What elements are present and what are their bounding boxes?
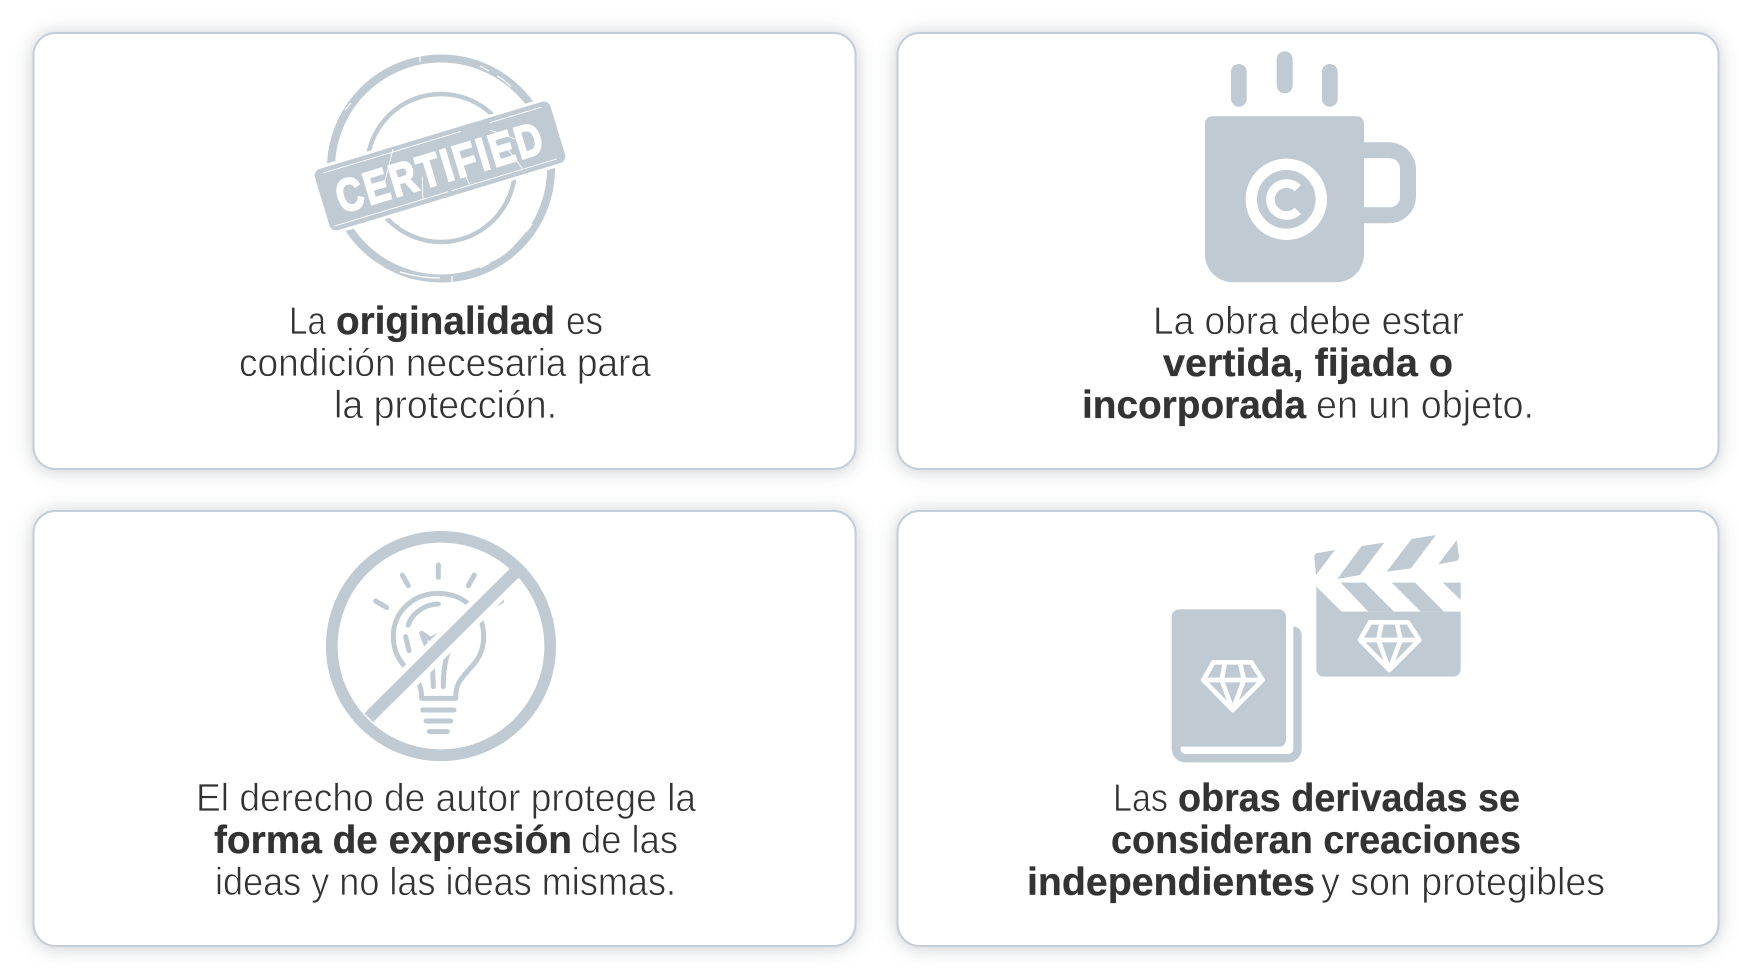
text: forma de expresion: forma de expresión: [214, 819, 572, 862]
icon: crossed light bulb: [332, 537, 550, 755]
panel: obra fijada: [898, 33, 1718, 469]
icon: certified stamp: [310, 54, 570, 284]
text: obras derivadas: y son protegibles: [1321, 861, 1605, 904]
panel: obras derivadas: [898, 511, 1718, 946]
text: obra fijada: en un objeto.: [1316, 384, 1534, 427]
text: obra fijada: [1082, 300, 1534, 427]
icon: clapperboard: [1314, 535, 1461, 677]
text: obra fijada: incorporada: [1082, 384, 1306, 427]
text: obras derivadas: consideran creaciones: [1111, 819, 1521, 862]
panel: originalidad: [34, 33, 856, 469]
text: originalidad: la protección.: [334, 384, 557, 427]
panel: forma de expresion: [34, 511, 856, 946]
text: forma de expresion: [196, 777, 696, 904]
text: obras derivadas: [1027, 777, 1605, 904]
text: originalidad: [239, 300, 651, 427]
stamp word: CERTIFIED: [329, 111, 551, 223]
text: originalidad: La: [289, 300, 326, 343]
icon: book: [1172, 609, 1302, 762]
text: obras derivadas: obras derivadas se: [1178, 777, 1520, 820]
text: originalidad: originalidad: [336, 300, 555, 343]
text: forma de expresion: ideas y no las ideas mismas.: [215, 861, 676, 904]
text: obra fijada: La obra debe estar: [1153, 300, 1464, 343]
text: originalidad: condición necesaria para: [239, 342, 651, 385]
text: obras derivadas: independientes: [1027, 861, 1315, 904]
text: forma de expresion: de las: [581, 819, 678, 862]
icon: copyright mug: [1205, 51, 1416, 282]
text: obra fijada: vertida, fijada o: [1163, 342, 1453, 385]
text: forma de expresion: El derecho de autor protege la: [196, 777, 696, 820]
icon: book and clapperboard with diamonds: [1172, 535, 1461, 762]
text: obras derivadas: Las: [1113, 777, 1168, 820]
text: originalidad: es: [566, 300, 603, 343]
